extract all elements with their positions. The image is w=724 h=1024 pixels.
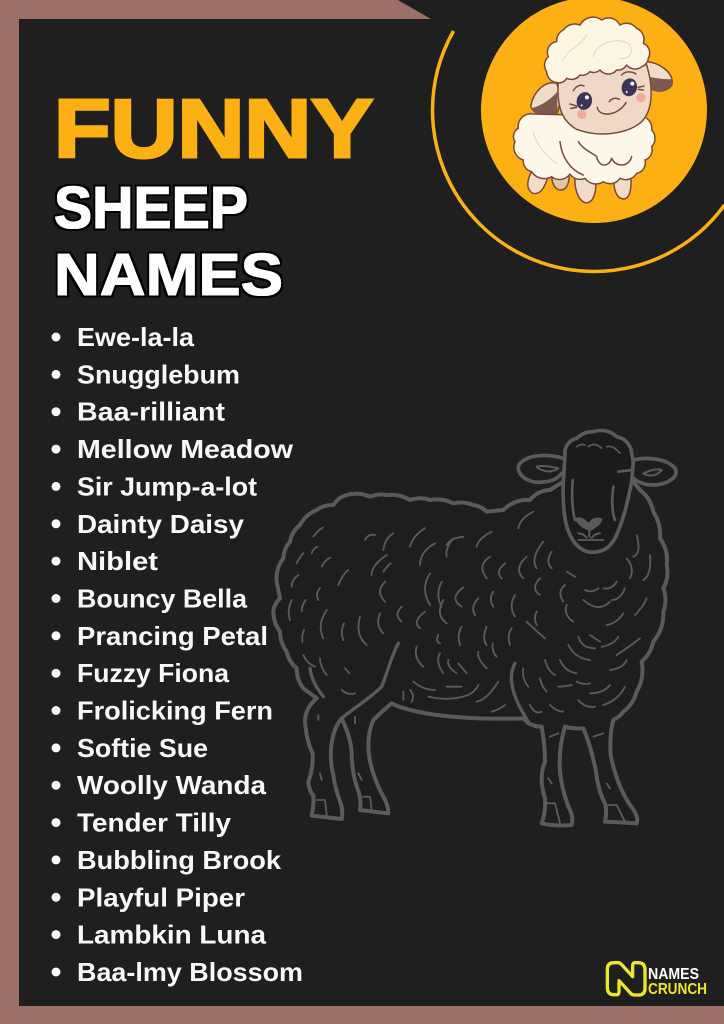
name item: Niblet (77, 546, 158, 576)
name item: Prancing Petal (77, 621, 268, 651)
name item: Fuzzy Fiona (77, 658, 230, 688)
name item: Mellow Meadow (77, 434, 294, 464)
lamb head wool (545, 17, 650, 83)
name item: Lambkin Luna (77, 920, 267, 950)
title word: NAMES: NAMES (54, 242, 283, 308)
sheep face details (572, 444, 632, 540)
lamb head (558, 63, 651, 134)
name item (52, 546, 158, 576)
name item: Sir Jump-a-lot (77, 471, 257, 501)
lamb head wool curls (563, 35, 631, 60)
sheep body outline (273, 482, 667, 826)
sheep wool curls (289, 512, 650, 823)
background sheep illustration (273, 430, 676, 826)
lamb eyes (575, 77, 639, 112)
name item: Snugglebum (77, 359, 240, 389)
name item: Softie Sue (77, 733, 208, 763)
title word: FUNNY: FUNNY (54, 82, 373, 175)
name item: Tender Tilly (77, 808, 232, 838)
decorative ring (432, 31, 724, 272)
lamb wool detail (560, 142, 632, 175)
name item: Playful Piper (77, 882, 245, 912)
lamb smile and brows (570, 72, 644, 114)
yellow circle (481, 0, 707, 223)
lamb legs (528, 168, 631, 203)
sheep inner leg and belly lines (310, 643, 528, 722)
name item: Dainty Daisy (77, 509, 245, 539)
name item: Bubbling Brook (77, 845, 282, 875)
name item: Woolly Wanda (77, 770, 267, 800)
lamb wool soft curl (533, 132, 557, 163)
name item: Bouncy Bella (77, 584, 248, 614)
lamb woolly body (513, 114, 655, 184)
logo word CRUNCH: CRUNCH (648, 981, 707, 998)
icon: cute lamb (513, 17, 672, 203)
list of sheep names (52, 322, 303, 987)
sheep head (563, 430, 633, 552)
name item: Ewe-la-la (77, 322, 195, 352)
icon: logo N mark (607, 963, 645, 995)
name item: Baa-lmy Blossom (77, 957, 303, 987)
title (54, 82, 373, 308)
name item: Frolicking Fern (77, 696, 273, 726)
name item: Baa-rilliant (77, 397, 225, 427)
sheep ears (518, 455, 676, 485)
lamb ears (531, 62, 672, 117)
logo: Names Crunch (607, 963, 707, 998)
title word: SHEEP: SHEEP (54, 175, 248, 241)
logo word NAMES: NAMES (648, 966, 699, 983)
lamb cheeks (577, 93, 646, 119)
